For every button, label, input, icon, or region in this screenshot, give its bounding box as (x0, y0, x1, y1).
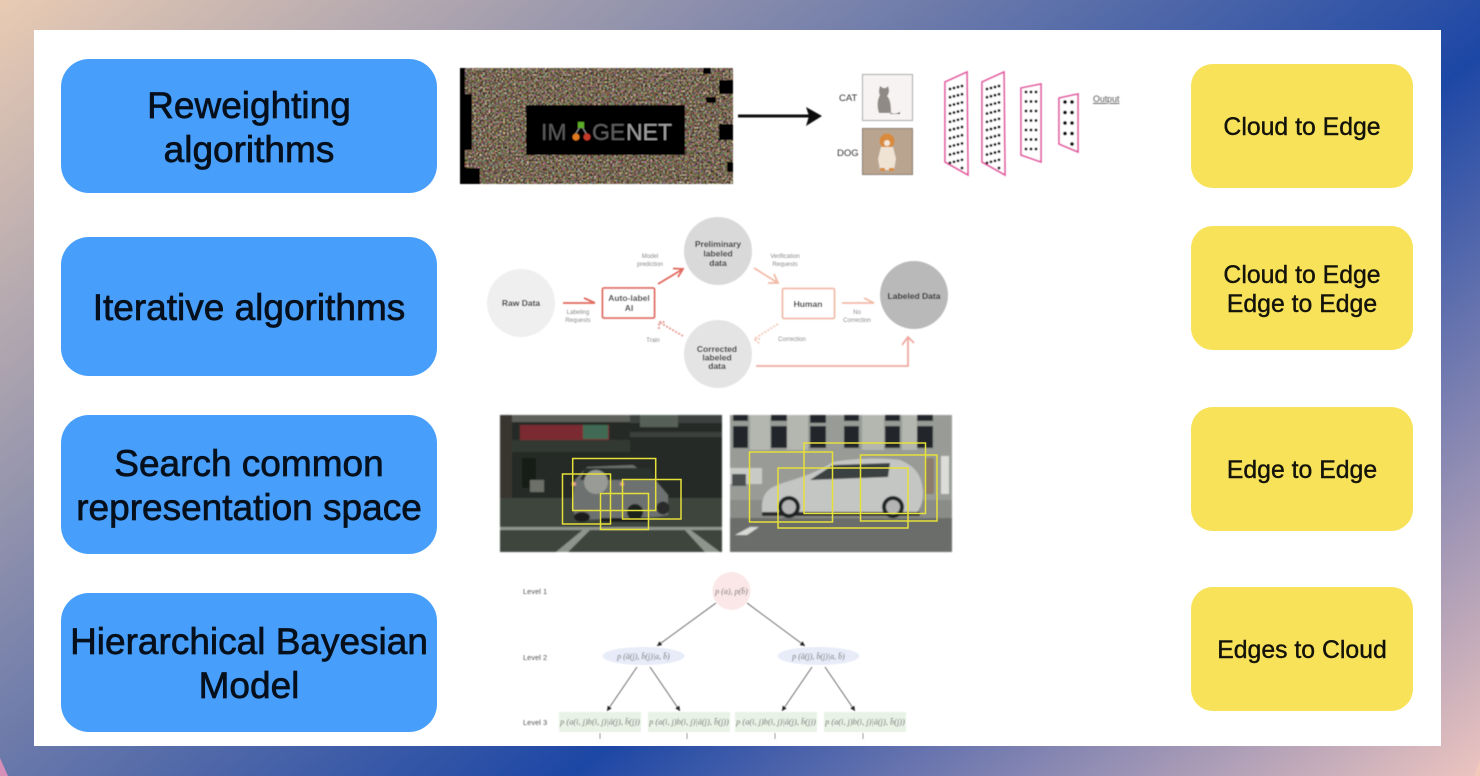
ImageNet logo: GE (592, 119, 625, 145)
arrow: ImageNet to classes (738, 107, 822, 126)
label: Reweighting algorithms (61, 59, 437, 193)
edge captions: Train (646, 338, 660, 344)
edge captions: No (853, 310, 861, 316)
tag: Cloud to Edge: Cloud to Edge (1223, 114, 1381, 141)
tag: Cloud to Edge (1191, 64, 1413, 188)
node: Preliminary labeled data: Preliminary (695, 239, 741, 249)
node: Corrected labeled data: Corrected (697, 344, 737, 354)
tag: Cloud to Edge, Edge to Edge (1191, 226, 1413, 350)
iterative labeling flow diagram (487, 217, 948, 388)
node: Preliminary labeled data: data (709, 258, 727, 268)
node: Human: Human (794, 299, 822, 309)
layer 4 (1059, 94, 1078, 152)
node: Raw Data (487, 269, 555, 337)
label: Search common representation space: representation space (76, 487, 422, 528)
node: Corrected labeled data (684, 320, 752, 388)
node: Raw Data: Raw Data (502, 298, 540, 308)
edge captions (565, 254, 871, 344)
tag: Cloud to Edge, Edge to Edge: Cloud to Edge (1223, 262, 1381, 288)
nodes: level 2: p (ā(j), b̄(j)|a, b̄) (791, 652, 845, 661)
node: Corrected labeled data: labeled (702, 352, 732, 362)
detection boxes (562, 458, 681, 530)
layer 2 (982, 72, 1005, 175)
tree arrows (607, 603, 855, 711)
label: Reweighting algorithms: algorithms (164, 128, 334, 170)
nodes: level 3: p (a(i, j)b(i, j)|ā(j), b̄(j)) (824, 718, 905, 726)
cat and dog samples (837, 74, 912, 174)
label: Hierarchical Bayesian Model (61, 593, 437, 732)
nodes: level 3: p (a(i, j)b(i, j)|ā(j), b̄(j)) (648, 718, 729, 726)
edge captions: Requests (565, 318, 591, 324)
node: Labeled Data (880, 261, 948, 329)
node: root (712, 572, 750, 610)
nodes: level 3: p (a(i, j)b(i, j)|ā(j), b̄(j)) (559, 718, 640, 726)
node: Labeled Data: Labeled Data (888, 291, 941, 301)
nodes: level 2: p (ā(j), b̄(j)|a, b̄) (616, 652, 670, 661)
label: Reweighting algorithms: Reweighting (147, 84, 351, 126)
arrows (563, 268, 914, 366)
nodes: level 3 (559, 712, 906, 732)
level labels: Level 2 (523, 653, 547, 662)
tag: Edge to Edge: Edge to Edge (1227, 457, 1377, 484)
edge captions: prediction (637, 262, 663, 268)
photo: silver hatchback with detection boxes (730, 415, 952, 552)
icon: dog photo (862, 128, 912, 174)
node: Corrected labeled data: data (708, 361, 726, 371)
node: Human (782, 288, 834, 318)
edge captions: Labeling (567, 310, 589, 316)
ImageNet logo: IM (541, 119, 567, 145)
label: Iterative algorithms (61, 237, 437, 376)
node: Preliminary labeled data: labeled (703, 248, 733, 258)
label: Hierarchical Bayesian Model: Model (199, 665, 299, 706)
node: root: p (a), p(b̄) (714, 587, 748, 596)
node: Auto-label AI: AI (625, 303, 633, 313)
level labels (523, 587, 547, 727)
edge captions: Verification (770, 254, 800, 260)
node: Auto-label AI: Auto-label (608, 293, 650, 303)
hierarchical Bayesian tree diagram (523, 572, 906, 739)
label: Output: Output (1093, 94, 1120, 104)
layer 1 (945, 72, 968, 175)
edge captions: Correction (778, 337, 806, 343)
photo: dark street SUV with detection boxes (500, 415, 722, 552)
tag: Edges to Cloud (1191, 587, 1413, 711)
tag: Edges to Cloud: Edges to Cloud (1217, 637, 1387, 664)
image: ImageNet mosaic (460, 68, 733, 184)
label: Iterative algorithms: Iterative algorithms (93, 287, 405, 328)
detection boxes (750, 443, 937, 528)
label: Hierarchical Bayesian Model: Hierarchical Bayesian (70, 621, 428, 662)
tag: Edge to Edge (1191, 407, 1413, 531)
nodes: level 2 (602, 647, 860, 665)
ImageNet logo (526, 105, 685, 155)
edge captions: Requests (772, 262, 798, 268)
node: Auto-label AI (602, 288, 654, 318)
level labels: Level 1 (523, 587, 547, 596)
layer 3 (1021, 84, 1041, 162)
nodes: level 3: p (a(i, j)b(i, j)|ā(j), b̄(j)) (735, 718, 816, 726)
icon: cat photo (862, 74, 912, 120)
tag: Cloud to Edge, Edge to Edge: Edge to Edge (1227, 290, 1377, 318)
node: Preliminary labeled data (684, 217, 752, 285)
level labels: Level 3 (523, 718, 547, 727)
label: DOG: DOG (837, 148, 859, 159)
neural network layers (945, 72, 1120, 175)
edge captions: Correction (843, 318, 871, 324)
label: CAT: CAT (839, 93, 857, 104)
ImageNet logo: NET (626, 119, 672, 145)
label: Search common representation space: Search common (114, 443, 384, 484)
label: Search common representation space (61, 415, 437, 554)
edge captions: Model (642, 254, 658, 260)
